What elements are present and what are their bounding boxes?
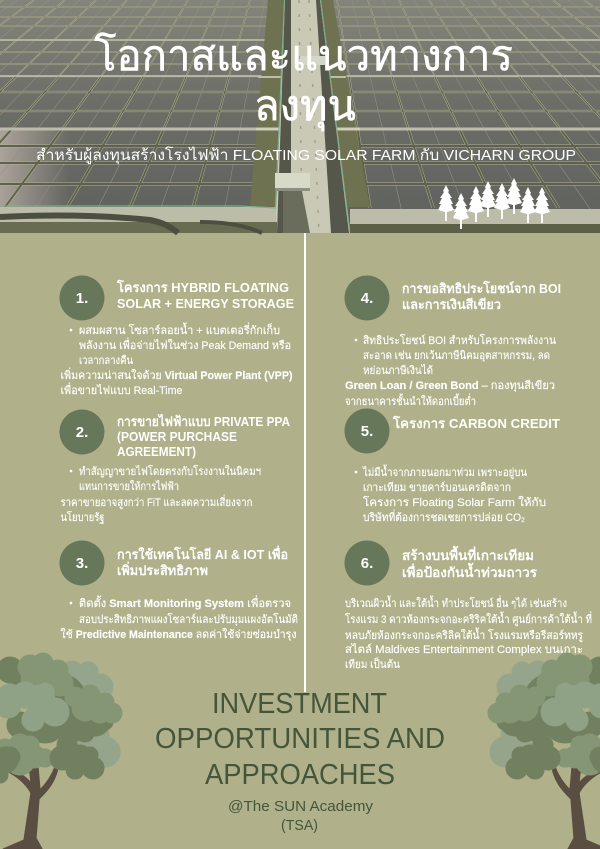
number badge 3 [60,540,104,586]
body 4: Green Loan / Green Bond – กองทุนสีเขียว [345,379,555,392]
body 4: สิทธิประโยชน์ BOI สำหรับโครงการพลังงาน [363,333,556,347]
body 1: เพื่อขายไฟแบบ Real-Time [60,382,182,397]
heading 1: SOLAR + ENERGY STORAGE [117,296,294,311]
heading 2: การขายไฟฟ้าแบบ PRIVATE PPA [117,413,291,429]
closing title [155,688,445,791]
number badge 5: 5. [361,423,373,440]
number badge 2 [60,410,104,454]
number badge 3: 3. [76,555,88,572]
credit line: @The SUN Academy [228,798,374,815]
heading 6: สร้างบนพื้นที่เกาะเทียม [402,545,534,563]
body 4: หย่อนภาษีเงินได้ [363,364,433,377]
heading 3: เพิ่มประสิทธิภาพ [117,561,208,578]
body 3: ติดตั้ง Smart Monitoring System เพื่อตรวจ [79,595,291,610]
main title (Thai) [94,31,513,132]
icon: right tree [489,654,600,849]
body 4: สะอาด เช่น ยกเว้นภาษีนิคมอุตสาหกรรม, ลด [363,349,550,362]
heading 3 [117,545,288,578]
heading 4: และการเงินสีเขียว [402,297,501,312]
body 1: เพิ่มความน่าสนใจด้วย Virtual Power Plant (VPP) [60,367,293,382]
number badge 2: 2. [76,424,88,441]
body 4: จากธนาคารชั้นนำให้ดอกเบี้ยต่ำ [345,393,476,408]
panel: item 6 artificial island [344,540,592,671]
body 2: ทำสัญญาขายไฟโดยตรงกับโรงงานในนิคมฯ [79,464,261,478]
credit line [228,798,374,834]
subtitle: สำหรับผู้ลงทุนสร้างโรงไฟฟ้า FLOATING SOLAR FARM กับ VICHARN GROUP [36,146,576,165]
heading 1: โครงการ HYBRID FLOATING [116,279,289,295]
heading 2 [117,413,291,459]
main title (Thai): ลงทุน [254,82,356,132]
body 3: สอบประสิทธิภาพแผงโซลาร์และปรับมุมแผงอัตโนมัติ [79,612,298,626]
body 5: บริษัทที่ต้องการชดเชยการปล่อย CO₂ [363,509,525,524]
panel: item 3 AI and IoT [60,540,298,641]
number badge 1 [60,276,104,320]
body 2 [60,464,261,524]
closing title: APPROACHES [205,759,395,791]
number badge 5 [344,408,390,454]
panel: item 5 carbon credit [344,408,560,524]
body 6: บริเวณผิวน้ำ และใต้น้ำ ทำประโยชน์ อื่น ๆได้ เช่นสร้าง [345,595,567,610]
body 6 [345,595,592,671]
number badge 6 [344,540,390,586]
body 1 [60,322,293,397]
body 6: หลบภัยห้องกระจกอะคริลิคใต้น้ำ โรงแรมหรือรีสอร์ทหรู [345,627,583,642]
body 1: พลังงาน เพื่อจ่ายไฟในช่วง Peak Demand หรือ [79,337,291,352]
body 3 [60,595,298,641]
icon: left tree [0,654,121,849]
header photo: floating solar farm [0,0,600,233]
icon: white pine trees [438,178,550,229]
floating walkways along the bottom edge [0,207,276,222]
body 3: ใช้ Predictive Maintenance ลดค่าใช้จ่ายซ่อมบำรุง [60,628,296,641]
heading 1 [116,279,294,311]
panel: item 4 BOI and green finance [344,276,561,408]
heading 2: AGREEMENT) [117,444,196,459]
number badge 4 [344,276,390,320]
heading 3: การใช้เทคโนโลยี AI & IOT เพื่อ [117,545,288,562]
panel: item 1 hybrid floating solar [60,276,294,397]
heading 6 [402,545,537,580]
body 5: เกาะเทียม ขายคาร์บอนเครดิตจาก [363,481,511,494]
heading 4: การขอสิทธิประโยชน์จาก BOI [402,280,561,296]
body 1: ผสมผสาน โซลาร์ลอยน้ำ + แบตเตอรี่กักเก็บ [79,322,280,337]
central walkway [275,0,350,233]
body 5: โครงการ Floating Solar Farm ให้กับ [363,495,546,509]
credit line: (TSA) [281,817,318,834]
water channels beside the walkway [250,0,285,207]
number badge 6: 6. [361,555,373,572]
panel: item 2 private PPA [60,410,291,524]
body 1: เวลากลางคืน [79,354,133,367]
heading 5: โครงการ CARBON CREDIT [392,415,560,431]
heading 6: เพื่อป้องกันน้ำท่วมถาวร [402,562,537,580]
number badge 1: 1. [76,290,88,307]
main title (Thai): โอกาสและแนวทางการ [94,31,513,79]
heading 2: (POWER PURCHASE [117,429,237,444]
body 6: สไตล์ Maldives Entertainment Complex บนเกาะ [345,643,583,656]
body 4 [345,333,556,408]
body 2: ราคาขายอาจสูงกว่า FiT และลดความเสี่ยงจาก [60,494,252,509]
body 2: นโยบายรัฐ [60,510,104,524]
body 2: แทนการขายให้การไฟฟ้า [79,480,179,493]
closing title: INVESTMENT [212,688,387,720]
number badge 4: 4. [361,290,373,307]
body 5 [355,464,546,524]
body 6: เทียม เป็นต้น [345,657,400,671]
centre divider [304,233,306,692]
body 5: ไม่มีน้ำจากภายนอกมาท่วม เพราะอยู่บน [362,464,527,479]
heading 4 [402,280,561,312]
closing title: OPPORTUNITIES AND [155,723,445,755]
